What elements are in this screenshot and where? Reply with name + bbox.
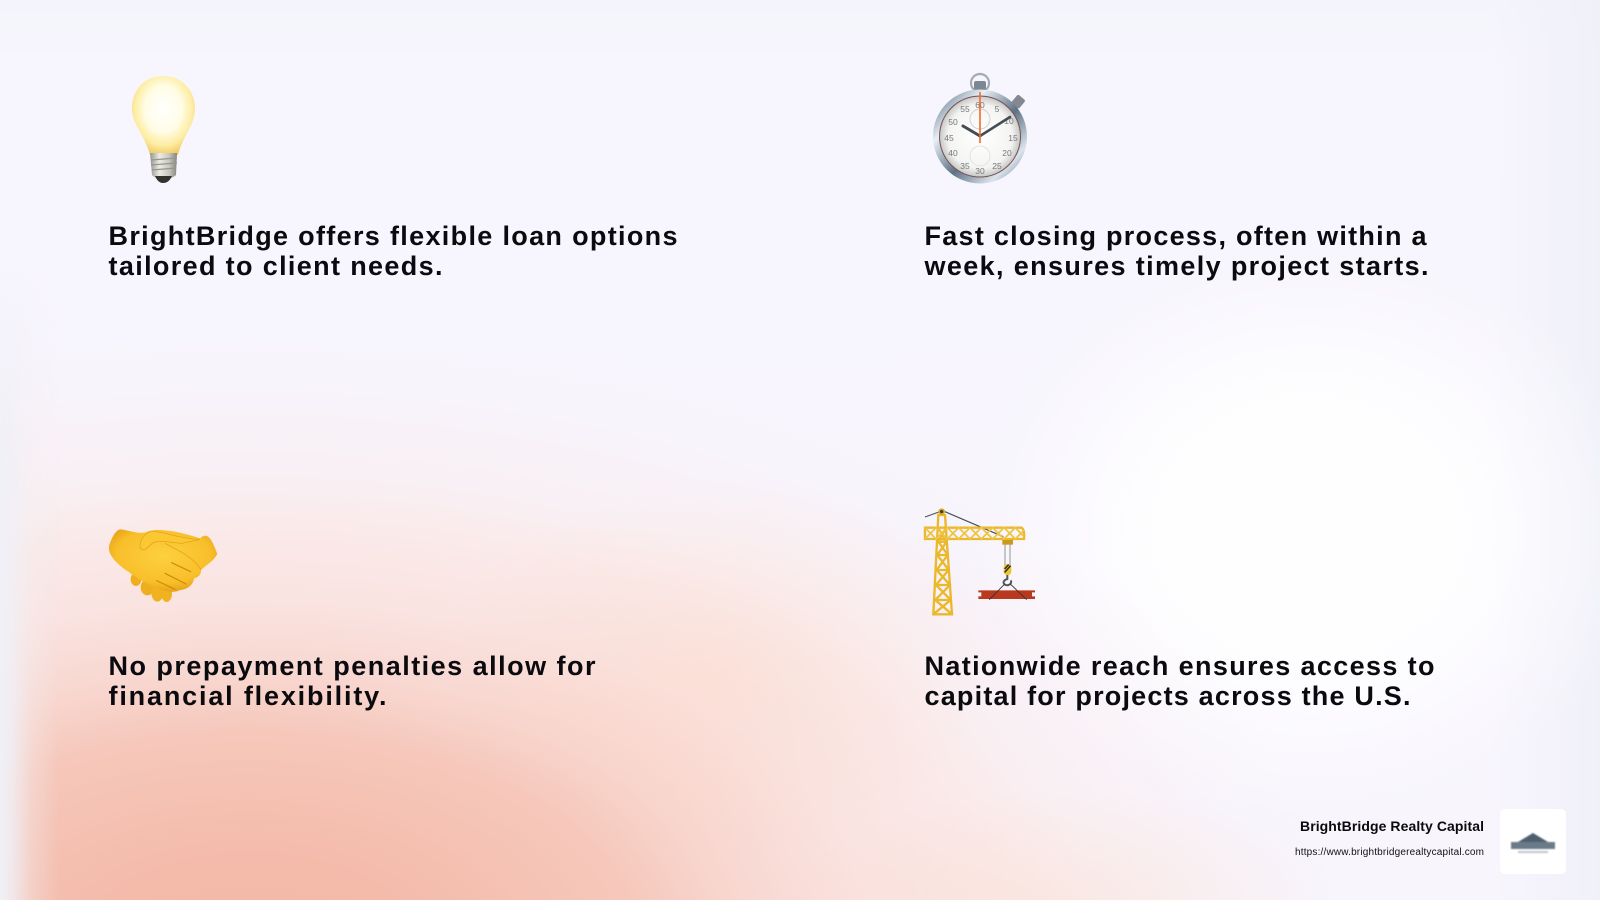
heading: fast closing — [924, 221, 1428, 281]
heading: nationwide reach: capital for projects across the U.S. — [924, 681, 1410, 711]
icon: handshake — [109, 529, 217, 602]
icon: stopwatch: 20 — [1002, 148, 1012, 158]
logo card — [1500, 809, 1566, 874]
panel: flexible loan options — [108, 76, 678, 281]
heading: no prepayment penalties — [108, 651, 596, 711]
icon: stopwatch: 45 — [944, 133, 954, 143]
heading: flexible loan options — [108, 221, 678, 281]
heading: flexible loan options: BrightBridge offers flexible loan options — [108, 221, 678, 251]
heading: fast closing: Fast closing process, often within a — [924, 221, 1427, 251]
icon: construction crane — [925, 508, 1035, 614]
panel: nationwide reach — [924, 508, 1434, 711]
icon: light bulb — [132, 76, 195, 183]
heading: no prepayment penalties: No prepayment penalties allow for — [108, 651, 596, 681]
heading: fast closing: week, ensures timely project starts. — [924, 251, 1428, 281]
heading: no prepayment penalties: financial flexibility. — [108, 681, 386, 711]
footer branding — [1295, 809, 1566, 874]
icon: stopwatch: 10 — [1004, 116, 1014, 126]
icon: stopwatch: 40 — [948, 148, 958, 158]
icon: stopwatch: 50 — [948, 117, 958, 127]
icon: stopwatch: 60 — [975, 100, 985, 110]
company name: BrightBridge Realty Capital — [1300, 818, 1484, 834]
website url: https://www.brightbridgerealtycapital.com — [1295, 847, 1484, 858]
icon: stopwatch: 25 — [992, 161, 1002, 171]
heading: flexible loan options: tailored to client needs. — [108, 251, 442, 281]
icon: stopwatch: 15 — [1008, 133, 1018, 143]
icon: stopwatch: 30 — [975, 166, 985, 176]
heading: nationwide reach: Nationwide reach ensures access to — [924, 651, 1434, 681]
background gradient — [2, 400, 1463, 900]
panel: no prepayment penalties — [108, 529, 596, 711]
icon: stopwatch: 55 — [960, 104, 970, 114]
icon: stopwatch: 5 — [995, 104, 1000, 114]
icon: stopwatch — [933, 74, 1027, 184]
heading: nationwide reach — [924, 651, 1434, 711]
panel: fast closing — [924, 74, 1428, 281]
icon: stopwatch: 35 — [960, 161, 970, 171]
